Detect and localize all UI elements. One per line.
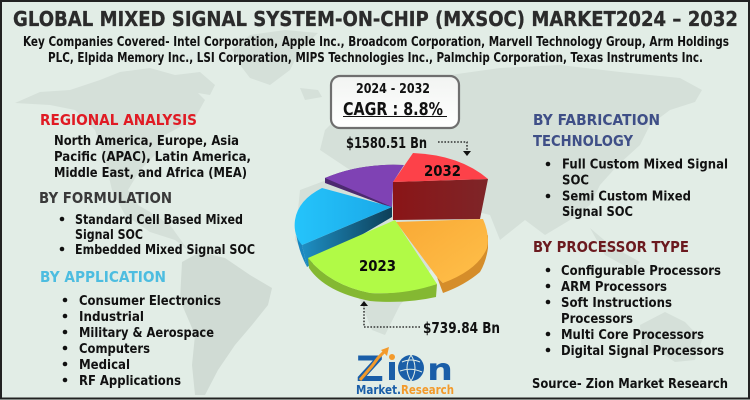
value 2032 with arrow [346, 134, 471, 156]
by processor type section: ARM Processors [561, 280, 667, 295]
CAGR box: CAGR : 8.8% [343, 99, 443, 120]
by formulation section: BY FORMULATION [39, 189, 172, 207]
orange slice [396, 219, 488, 293]
regional analysis section: Middle East, and Africa (MEA) [54, 166, 247, 181]
by processor type section [533, 238, 724, 359]
regional analysis section: North America, Europe, Asia [54, 134, 239, 149]
CAGR box: 2024 - 2032 [356, 81, 430, 97]
by application section: RF Applications [79, 374, 181, 389]
by formulation section [39, 189, 255, 258]
blue slice [295, 188, 392, 267]
Zion Market Research logo: n [427, 353, 453, 388]
by fabrication technology section: SOC [562, 174, 589, 188]
key companies text [23, 35, 729, 66]
regional analysis section [40, 111, 251, 181]
by processor type section: Processors [561, 312, 633, 327]
by fabrication technology section: Semi Custom Mixed [562, 190, 691, 204]
regional analysis section: REGIONAL ANALYSIS [40, 111, 197, 129]
by processor type section: Configurable Processors [561, 264, 721, 279]
by application section: Industrial [79, 310, 144, 325]
by formulation section: Standard Cell Based Mixed [75, 213, 243, 228]
by application section [40, 268, 221, 389]
red slice [393, 153, 488, 220]
regional analysis section: Pacific (APAC), Latin America, [54, 150, 251, 165]
by application section: Consumer Electronics [79, 294, 221, 309]
by processor type section: Multi Core Processors [561, 328, 704, 343]
by application section: Medical [79, 358, 130, 373]
value 2032 with arrow: $1580.51 Bn [346, 134, 427, 152]
value 2023 with arrow: $739.84 Bn [423, 319, 500, 337]
green slice [308, 220, 437, 302]
by formulation section: Signal SOC [75, 228, 143, 243]
CAGR box [331, 76, 459, 128]
by fabrication technology section: Signal SOC [562, 205, 633, 220]
by formulation section: Embedded Mixed Signal SOC [75, 243, 255, 258]
Zion Market Research logo: Market. [356, 383, 401, 397]
label 2023: 2023 [359, 257, 396, 275]
by fabrication technology section: Full Custom Mixed Signal [562, 158, 728, 172]
label 2032: 2032 [424, 162, 461, 180]
3D pie chart [295, 153, 488, 302]
source note: Source- Zion Market Research [532, 377, 728, 392]
by fabrication technology section: BY FABRICATION [533, 111, 660, 129]
by application section: Military & Aerospace [79, 326, 214, 341]
by fabrication technology section [533, 111, 728, 220]
by fabrication technology section: TECHNOLOGY [533, 132, 634, 150]
purple slice [325, 165, 404, 208]
Zion Market Research logo: Research [401, 383, 454, 397]
by processor type section: Digital Signal Processors [561, 344, 724, 359]
Zion Market Research logo: Z [356, 350, 384, 390]
Zion Market Research logo [356, 347, 454, 397]
by processor type section: BY PROCESSOR TYPE [533, 238, 689, 256]
value 2023 with arrow [360, 301, 500, 337]
by application section: Computers [79, 342, 150, 357]
by application section: BY APPLICATION [40, 268, 166, 286]
by processor type section: Soft Instructions [561, 296, 672, 311]
